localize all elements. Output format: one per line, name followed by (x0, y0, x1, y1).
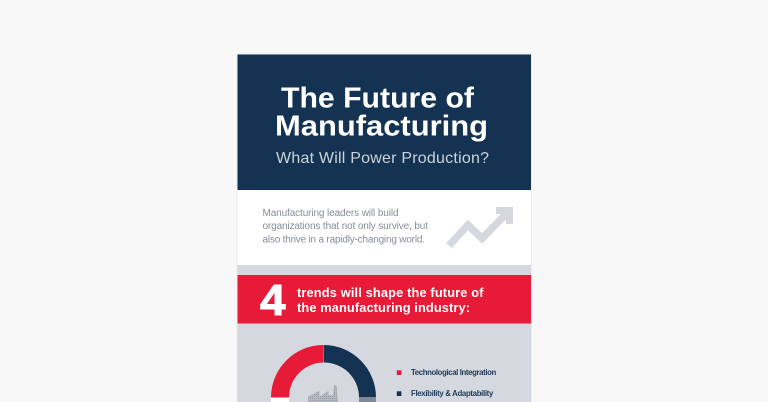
icon: factory (308, 386, 338, 402)
title (275, 82, 488, 143)
big number 4: 4 (260, 276, 286, 325)
intro text: organizations that not only survive, but (262, 221, 428, 232)
legend item: flexibility and adaptability: Flexibility & Adaptability (411, 389, 494, 398)
intro text: also thrive in a rapidly-changing world. (262, 235, 425, 246)
panel: gray band (238, 265, 531, 402)
panel: intro (238, 190, 531, 265)
banner text: the manufacturing industry: (297, 300, 470, 315)
icon: rising arrow (449, 210, 510, 246)
segment: gray (359, 397, 376, 402)
page card (236, 54, 532, 402)
intro text (262, 208, 428, 246)
legend (397, 368, 497, 398)
subtitle: What Will Power Production? (276, 150, 489, 167)
banner text: trends will shape the future of (297, 285, 484, 300)
legend item: technological integration: Technological Integration (411, 368, 497, 377)
banner text (297, 285, 484, 315)
intro text: Manufacturing leaders will build (262, 208, 398, 219)
title: Manufacturing (275, 111, 488, 143)
panel: header (238, 54, 531, 190)
segment: flexibility and adaptability (324, 345, 376, 398)
panel: trends banner (238, 275, 531, 325)
title: The Future of (281, 82, 474, 114)
donut chart (271, 345, 376, 402)
segment: technological integration (271, 345, 323, 398)
segment: white (271, 398, 289, 402)
